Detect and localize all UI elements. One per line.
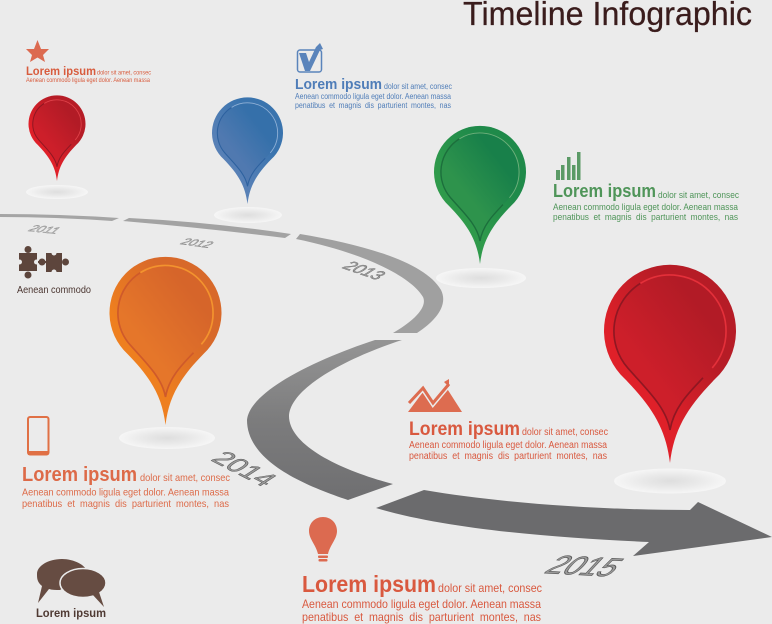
text block: bulb: penatibus et magnis dis parturient montes, nas [302,610,541,624]
text block: star [26,64,151,84]
text block: orange: dolor sit amet, consec [140,472,230,484]
arrow segment 2015 [376,490,772,556]
pin: 2011 red [28,95,86,181]
text block: green: Aenean commodo ligula eget dolor. Aenean massa [553,202,739,213]
year label 2013: 2013 [338,258,390,283]
text block: green [553,181,739,223]
icon: mountain chart [408,379,462,412]
pin: 2015 red [604,265,736,463]
year label 2014: 2014 [205,447,284,491]
text block: bulb: Aenean commodo ligula eget dolor. Aenean massa [302,597,541,611]
text block: mountain: Aenean commodo ligula eget dolor. Aenean massa [409,440,607,451]
icon: bar chart [556,152,580,180]
caption: speech bubbles: Lorem ipsum [36,608,106,620]
pin: 2012 blue [212,97,283,204]
text block: blue [295,76,452,110]
text block: star: Aenean commodo ligula eget dolor. Aenean massa [26,78,151,84]
pin shadow 1 [26,185,88,199]
year label 2015: 2015 [538,550,632,582]
text block: blue: Aenean commodo ligula eget dolor. Aenean massa [295,92,451,101]
text block: mountain: penatibus et magnis dis parturient montes, nas [409,451,607,462]
pin: 2013 green [434,126,526,264]
road segment 2013 [296,234,443,333]
icon: speech bubbles [37,559,106,607]
icon: puzzle [17,246,69,278]
icon: phone [28,417,48,455]
text block: bulb: dolor sit amet, consec [438,581,542,595]
text block: orange [22,464,230,510]
text block: orange: Lorem ipsum [22,464,137,486]
text block: orange: Aenean commodo ligula eget dolor. Aenean massa [22,486,229,498]
icon: checkbox [298,43,323,72]
road segment 2011 [0,214,119,221]
pin shadow 4 [119,427,215,449]
pin shadow 3 [436,268,526,288]
text block: green: dolor sit amet, consec [658,190,739,201]
text block: bulb [302,571,542,624]
text block: mountain [409,419,608,462]
icon: star [26,40,49,62]
text block: star: Lorem ipsum [26,64,96,78]
pin shadow 5 [614,468,726,494]
text block: green: Lorem ipsum [553,181,656,201]
icon: light bulb [309,517,337,562]
text block: orange: penatibus et magnis dis parturient montes, nas [22,498,229,510]
caption: puzzle: Aenean commodo [17,285,91,296]
text block: blue: Lorem ipsum [295,76,382,93]
text block: blue: penatibus et magnis dis parturient montes, nas [295,101,451,110]
year label 2012: 2012 [177,236,216,250]
timeline road [0,214,772,556]
text block: blue: dolor sit amet, consec [384,82,452,91]
text block: green: penatibus et magnis dis parturient montes, nas [553,212,738,223]
year label 2011: 2011 [25,223,63,236]
road segment 2012 [123,218,291,238]
pin shadow 2 [214,207,282,223]
pin: 2014 orange [110,257,222,425]
text block: star: dolor sit amet, consec [97,70,151,76]
text block: mountain: dolor sit amet, consec [522,427,608,438]
road segment 2014 [247,340,402,500]
text block: bulb: Lorem ipsum [302,571,436,597]
text block: mountain: Lorem ipsum [409,419,520,440]
